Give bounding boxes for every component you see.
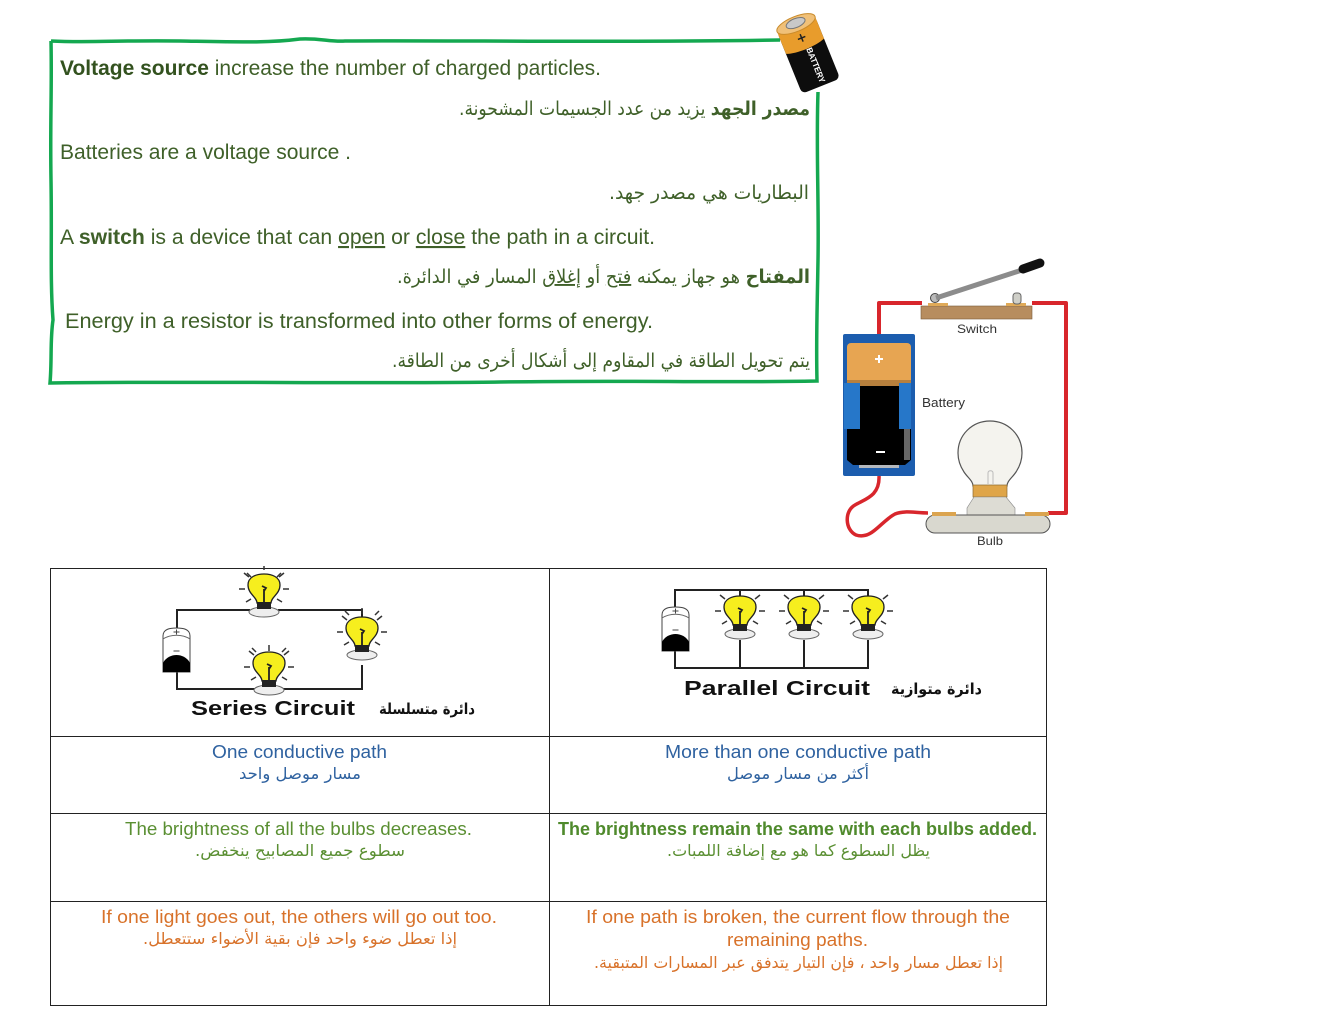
diagram: simple circuit <box>843 263 1066 548</box>
label: series circuit: Series Circuit <box>191 698 355 720</box>
panel: definitions frame <box>50 39 818 383</box>
label: parallel arabic: دائرة متوازية <box>891 680 982 698</box>
icon: right bulb <box>337 608 387 665</box>
text: parallel brightness <box>558 819 1037 861</box>
label: series arabic: دائرة متسلسلة <box>379 700 475 718</box>
text: parallel path: More than one conductive path <box>665 742 931 762</box>
label: switch: Switch <box>957 322 997 336</box>
text: parallel brightness: The brightness remain the same with each bulbs added. <box>558 819 1037 839</box>
icon: top bulb <box>239 566 289 617</box>
text: series failure: إذا تعطل ضوء واحد فإن بقية الأضواء ستتعطل. <box>143 928 457 949</box>
text: batteries arabic: البطاريات هي مصدر جهد. <box>609 182 809 204</box>
icon: bottom bulb <box>244 645 294 695</box>
text: parallel path: أكثر من مسار موصل <box>727 763 869 784</box>
icon: light bulb <box>926 421 1050 533</box>
icon: switch <box>921 263 1040 319</box>
wires <box>879 303 1066 513</box>
diagram: series circuit <box>163 566 475 720</box>
label: bulb: Bulb <box>977 534 1003 548</box>
text: resistor english: Energy in a resistor is transformed into other forms of energy. <box>65 310 653 333</box>
text: switch english: A switch is a device that can open or close the path in a circuit. <box>60 226 655 249</box>
icon: bulb 1 <box>715 595 765 640</box>
text: parallel failure: If one path is broken, the current flow through the <box>586 907 1010 927</box>
text: series failure: If one light goes out, the others will go out too. <box>101 907 497 927</box>
text: batteries english: Batteries are a voltage source . <box>60 141 351 164</box>
label: battery: Battery <box>922 396 966 410</box>
text: parallel failure: إذا تعطل مسار واحد ، فإن التيار يتدفق عبر المسارات المتبقية. <box>594 953 1003 973</box>
comparison table <box>50 566 1046 1006</box>
icon: cell <box>163 628 190 672</box>
text: parallel brightness: يظل السطوع كما هو مع إضافة اللمبات. <box>667 841 930 861</box>
text: series failure <box>101 907 497 949</box>
label: parallel circuit: Parallel Circuit <box>684 678 870 700</box>
text: parallel failure: remaining paths. <box>727 930 868 950</box>
text: resistor arabic: يتم تحويل الطاقة في المقاوم إلى أشكال أخرى من الطاقة. <box>392 348 810 373</box>
text: series brightness: The brightness of all the bulbs decreases. <box>125 819 472 839</box>
icon: bulb 3 <box>843 595 893 640</box>
icon: bulb 2 <box>779 595 829 640</box>
icon: large battery <box>843 334 915 476</box>
text: series brightness <box>125 819 472 861</box>
text: parallel failure <box>586 907 1010 973</box>
text: voltage source arabic: مصدر الجهد يزيد من عدد الجسيمات المشحونة. <box>459 98 810 120</box>
text: series brightness: سطوع جميع المصابيح ينخفض. <box>195 841 405 861</box>
icon: battery <box>774 9 840 94</box>
text: parallel path <box>665 742 931 784</box>
icon: battery: BATTERY <box>804 46 828 84</box>
text: series path: One conductive path <box>212 742 387 762</box>
text: series path <box>212 742 387 784</box>
icon: cell <box>662 607 689 651</box>
text: voltage source english: Voltage source increase the number of charged particles. <box>60 57 601 80</box>
diagram: parallel circuit <box>662 590 982 700</box>
text: switch arabic: المفتاح هو جهاز يمكنه فتح أو إغلاق المسار في الدائرة. <box>397 264 810 289</box>
text: series path: مسار موصل واحد <box>239 764 361 784</box>
